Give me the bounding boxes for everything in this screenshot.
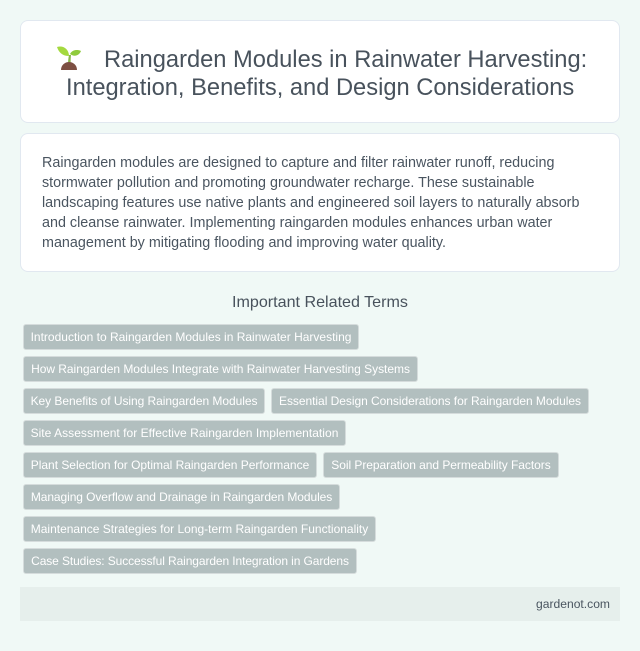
tag: Managing Overflow and Drainage in Raingarden Modules xyxy=(31,490,332,504)
summary text: Raingarden modules are designed to capture and filter rainwater runoff, reducing xyxy=(42,155,554,171)
tag: Essential Design Considerations for Raingarden Modules xyxy=(279,394,581,408)
panel: summary card xyxy=(20,133,620,272)
heading: Integration, Benefits, and Design Considerations xyxy=(66,75,574,101)
summary text: management by mitigating flooding and improving water quality. xyxy=(42,235,446,251)
tag: Site Assessment for Effective Raingarden Implementation xyxy=(31,426,338,440)
tag xyxy=(23,356,418,382)
tag: Soil Preparation and Permeability Factors xyxy=(331,458,551,472)
tag xyxy=(323,452,559,478)
tag: Plant Selection for Optimal Raingarden Performance xyxy=(31,458,309,472)
summary text: and cleanse rainwater. Implementing raingarden modules enhances urban water xyxy=(42,215,552,231)
tag xyxy=(23,420,346,446)
tag xyxy=(23,484,340,510)
summary text: stormwater pollution and promoting groundwater recharge. These sustainable xyxy=(42,175,534,191)
tag xyxy=(23,324,359,350)
footer text: gardenot.com xyxy=(536,597,610,611)
heading: Raingarden Modules in Rainwater Harvesting: xyxy=(104,47,587,73)
tag xyxy=(23,452,317,478)
heading: related terms: Important Related Terms xyxy=(232,293,408,311)
tag: Maintenance Strategies for Long-term Raingarden Functionality xyxy=(31,522,368,536)
summary text xyxy=(42,155,579,251)
tag xyxy=(23,516,376,542)
tag: Case Studies: Successful Raingarden Integration in Gardens xyxy=(31,554,349,568)
tag group: related terms xyxy=(23,324,589,574)
icon: seedling xyxy=(57,46,81,70)
summary text: landscaping features use native plants and engineered soil layers to naturally absorb xyxy=(42,195,579,211)
heading xyxy=(66,47,587,101)
footer bar xyxy=(20,587,620,621)
tag xyxy=(23,388,265,414)
tag: Introduction to Raingarden Modules in Rainwater Harvesting xyxy=(31,330,351,344)
tag xyxy=(271,388,589,414)
panel: title card xyxy=(20,20,620,123)
tag xyxy=(23,548,357,574)
tag: How Raingarden Modules Integrate with Rainwater Harvesting Systems xyxy=(31,362,410,376)
tag: Key Benefits of Using Raingarden Modules xyxy=(31,394,257,408)
